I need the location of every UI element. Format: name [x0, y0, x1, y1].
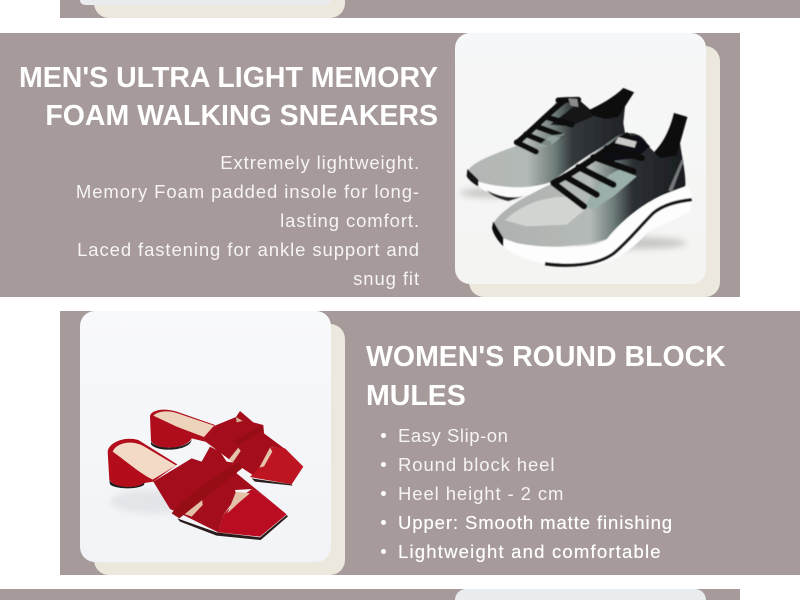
list: mule features	[381, 425, 673, 562]
heading: men's sneakers: FOAM WALKING SNEAKERS	[45, 100, 438, 132]
text block: sneaker features: Memory Foam padded insole for long-	[76, 181, 420, 202]
text block: sneaker features: Extremely lightweight.	[220, 152, 420, 173]
image: red block heel mules	[80, 311, 331, 562]
text block: sneaker features: lasting comfort.	[280, 210, 420, 231]
list: mule features: Heel height - 2 cm	[398, 483, 564, 504]
text block: sneaker features: Laced fastening for ankle support and	[77, 239, 420, 260]
back mule	[150, 410, 215, 448]
list: mule features: Lightweight and comfortable	[398, 541, 662, 562]
heading: women's mules: MULES	[366, 380, 466, 412]
panel: top cropped product	[60, 0, 800, 18]
heading: men's sneakers: MEN'S ULTRA LIGHT MEMORY	[19, 62, 438, 94]
back shoe	[478, 151, 598, 198]
list: mule features: Upper: Smooth matte finishing	[398, 512, 673, 533]
panel: women's mules	[60, 311, 800, 575]
panel: men's sneakers	[0, 33, 740, 297]
front shoe	[503, 185, 692, 267]
list: mule features: Round block heel	[398, 454, 555, 475]
list: mule features: Easy Slip-on	[398, 425, 508, 446]
heading: women's mules	[366, 341, 726, 412]
heading: women's mules: WOMEN'S ROUND BLOCK	[366, 341, 726, 373]
front mule	[108, 439, 177, 487]
text block: sneaker features	[76, 152, 420, 289]
image: grey and black sneakers	[455, 33, 706, 284]
text block: sneaker features: snug fit	[353, 268, 420, 289]
heading: men's sneakers	[19, 62, 438, 132]
panel: bottom cropped product	[0, 589, 740, 600]
